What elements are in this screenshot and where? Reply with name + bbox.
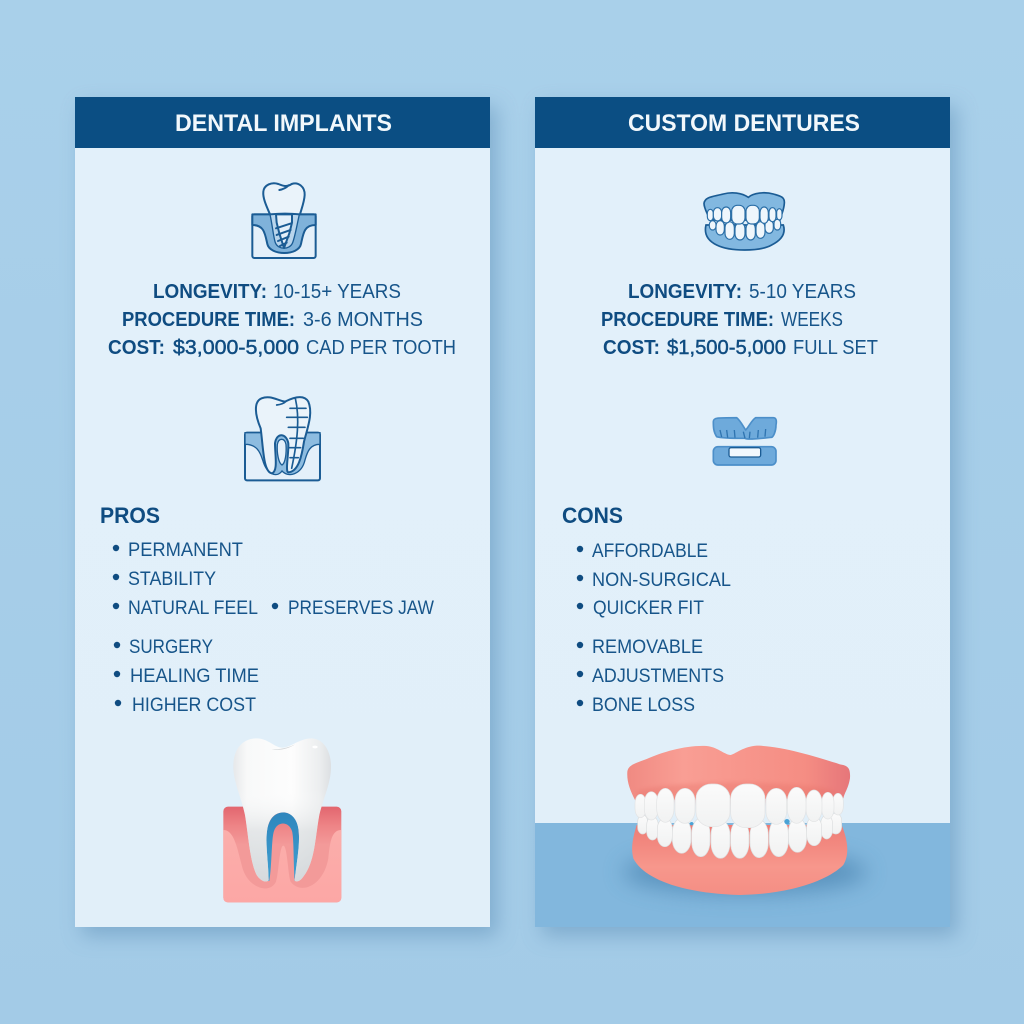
icon: natural tooth cross-section — [245, 397, 320, 480]
icon: denture trays — [713, 418, 776, 465]
header: dental implants: DENTAL IMPLANTS — [175, 110, 392, 137]
stats: implants: PROCEDURE TIME: — [122, 309, 295, 331]
stats: dentures: FULL SET — [793, 337, 878, 359]
stats: implants: COST: — [108, 337, 165, 359]
list: cons — [562, 503, 731, 716]
stats: dentures: $1,500-5,000 — [667, 337, 786, 359]
stats: dentures: WEEKS — [781, 309, 843, 331]
icon: implant in gum — [252, 183, 316, 258]
icon: denture set — [704, 193, 784, 250]
stats: dentures: 5-10 YEARS — [749, 281, 856, 303]
stats: implants: CAD PER TOOTH — [306, 337, 456, 359]
list: cons: BONE LOSS — [592, 694, 695, 716]
band: lower blue surface — [535, 823, 950, 927]
illustration: full dentures — [623, 746, 867, 895]
list: pros — [100, 503, 435, 716]
list: cons: REMOVABLE — [592, 636, 703, 658]
header: custom dentures: CUSTOM DENTURES — [628, 110, 860, 137]
list: pros: NATURAL FEEL — [128, 597, 258, 619]
list: cons: AFFORDABLE — [592, 540, 708, 562]
stats: implants: 10-15+ YEARS — [273, 281, 401, 303]
stats: dentures: COST: — [603, 337, 660, 359]
heading: pros: PROS — [100, 503, 160, 528]
stats: dentures: LONGEVITY: — [628, 281, 742, 303]
list: pros: PERMANENT — [128, 539, 243, 561]
heading: cons: CONS — [562, 503, 623, 528]
panel: custom dentures — [535, 97, 957, 936]
list: cons: QUICKER FIT — [593, 597, 704, 619]
header: custom dentures — [535, 97, 950, 148]
stats: dentures — [601, 281, 878, 359]
stats: implants: $3,000-5,000 — [173, 337, 299, 359]
list: cons: NON-SURGICAL — [592, 569, 731, 591]
illustration: tooth in gum — [223, 738, 341, 902]
list: pros: STABILITY — [128, 568, 216, 590]
list: cons: ADJUSTMENTS — [592, 665, 724, 687]
list: pros: HEALING TIME — [130, 665, 259, 687]
stats: implants — [108, 281, 456, 359]
list: pros: PRESERVES JAW — [288, 597, 435, 619]
stats: dentures: PROCEDURE TIME: — [601, 309, 774, 331]
stats: implants: 3-6 MONTHS — [303, 309, 423, 331]
list: pros: SURGERY — [129, 636, 213, 658]
stats: implants: LONGEVITY: — [153, 281, 267, 303]
panel: dental implants — [75, 97, 497, 936]
header: dental implants — [75, 97, 490, 148]
list: pros: HIGHER COST — [132, 694, 256, 716]
